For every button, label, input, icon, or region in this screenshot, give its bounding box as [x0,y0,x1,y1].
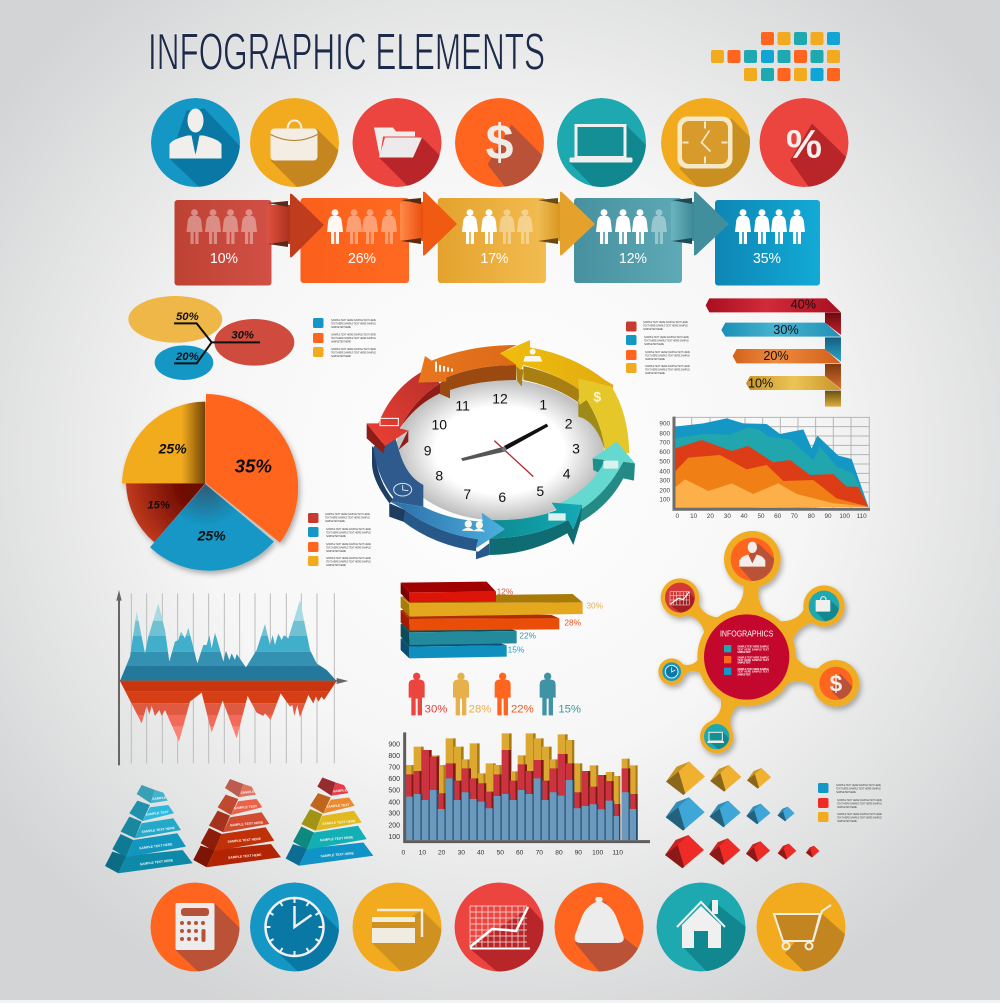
legend: bubble chart: TEXT HERE SAMPLE TEXT HERE SAMPLE [331,336,376,340]
y axis labels: 900 [659,421,670,428]
pie labels: 35% [235,456,272,477]
y axis labels: 400 [659,468,670,475]
pyramid: multicolour [286,777,373,866]
area: light orange [675,479,868,508]
x axis labels [676,513,867,520]
bar labels [497,586,604,655]
box: 26%: 26% [348,251,376,267]
person 15% [540,673,581,716]
clock face [396,379,604,521]
clock numbers: 9 [424,443,432,459]
3D horizontal bars [401,582,604,658]
x axis labels: 80 [808,513,815,520]
box: 35% [715,200,820,286]
legend: bubble chart [313,318,376,358]
person 22%: 22% [511,704,534,716]
y axis labels: 700 [388,765,400,772]
legend: clock: SAMPLE TEXT HERE [645,371,665,375]
legend: clock: SAMPLE TEXT HERE SAMPLE TEXT HERE [645,350,690,354]
bar 22% [401,624,517,645]
ring arrow: gold [500,340,613,403]
process row: percentage arrows with people [174,192,820,286]
icon: dollar [455,98,544,187]
legend: pie chart: SAMPLE TEXT HERE SAMPLE TEXT HERE [326,556,371,560]
y axis labels: 200 [659,487,670,494]
y axis labels: 300 [659,478,670,485]
y axis labels: 500 [659,459,670,466]
hub legend: TEXT HERE SAMPLE TEXT [737,671,770,674]
icon: credit cards [352,882,442,972]
box: 12%: 12% [619,251,647,267]
legend: clock: SAMPLE TEXT HERE [644,342,664,346]
grid [673,417,869,508]
lobe: dollar: $ [830,670,843,696]
person 30% [409,673,447,716]
pyramid: multicolour: SAMPLE TEXT HERE [320,835,354,842]
x axis labels: 0 [676,513,680,520]
y axis labels: 400 [388,799,400,806]
y axis labels: 600 [659,449,670,456]
legend: clock: TEXT HERE SAMPLE TEXT HERE SAMPLE [643,324,688,328]
slice: 35% orange [206,394,298,543]
slice: 15% red [126,483,205,542]
bar 12% [401,582,496,602]
title: INFOGRAPHIC ELEMENTS [148,24,545,82]
x axis labels: 30 [458,849,465,856]
legend: cubes: SAMPLE TEXT HERE [837,819,857,823]
bubble: 50% [128,296,222,343]
ring arrow: yellow [578,378,629,453]
area chart [659,417,870,520]
icon: percent: % [786,122,822,166]
hub legend: TEXT HERE SAMPLE TEXT [737,659,770,662]
icon: folder [352,98,442,187]
icon: shopping cart [756,882,846,972]
pyramid: teal: SAMPLE TEXT HERE [140,858,174,866]
pyramid: teal [105,785,193,873]
legend: pie chart: TEXT HERE SAMPLE TEXT HERE SAMPLE [326,560,371,564]
clock numbers [424,390,580,505]
clock with arrow ring [367,340,635,559]
bar labels: 28% [564,617,582,627]
clock numbers: 10 [432,417,447,433]
x axis labels: 10 [419,849,426,856]
legend: cubes: TEXT HERE SAMPLE TEXT HERE SAMPLE [837,802,882,806]
y axis labels: 800 [388,753,400,760]
legend: cubes: TEXT HERE SAMPLE TEXT HERE SAMPLE [836,786,881,790]
hub legend: SAMPLE TEXT HERE SAMPLE [737,668,769,671]
legend: pie chart: TEXT HERE SAMPLE TEXT HERE SAMPLE [326,546,371,550]
legend: clock: SAMPLE TEXT HERE [645,357,665,361]
blue stacks [406,778,638,840]
clock numbers: 5 [536,483,544,499]
box: 17%: 17% [480,251,509,267]
clock numbers: 2 [565,415,573,431]
clock numbers: 12 [492,390,508,406]
bar labels: 30% [586,600,604,610]
vertical guide lines [131,593,334,763]
arrow 1 [267,194,324,258]
legend: bubble chart: SAMPLE TEXT HERE SAMPLE TEXT HERE [331,347,376,351]
hub legend: SAMPLE TEXT [737,651,751,654]
person 30%: 30% [425,704,447,716]
x axis labels: 10 [690,513,698,520]
ribbon 30%: 30% [773,323,799,337]
x axis labels: 0 [401,849,405,856]
legend: pie chart: SAMPLE TEXT HERE [325,519,345,523]
x axis labels: 20 [438,849,446,856]
pie labels: 25% [197,528,226,544]
legend: pie chart: SAMPLE TEXT HERE [326,534,346,538]
legend: clock: SAMPLE TEXT HERE SAMPLE TEXT HERE [644,335,689,339]
ring arrow: blue [389,502,505,559]
box: 26% [300,198,409,283]
red cubes [665,835,820,868]
label 20%: 20% [175,351,199,363]
lobe: clock [662,662,681,681]
pyramid: teal: SAMPLE TEXT HERE [139,842,173,850]
box: 12% [574,198,682,283]
bubble: 30% [214,319,294,366]
legend: pie chart: TEXT HERE SAMPLE TEXT HERE SAMPLE [325,516,370,520]
x axis labels: 50 [757,513,765,520]
icon: laptop [557,98,646,187]
ribbon chart [706,298,841,407]
legend: cubes [818,783,882,823]
x axis labels: 90 [824,513,832,520]
legend: clock: TEXT HERE SAMPLE TEXT HERE SAMPLE [644,338,689,342]
icon: clock [250,882,339,972]
icon: calculator [150,882,240,972]
area: orange [675,455,868,508]
cubes [665,762,820,868]
person 15%: 15% [558,704,581,716]
person 28% [453,673,491,716]
pie labels: 15% [147,500,170,512]
box: 17% [438,198,546,283]
people percentages [409,673,581,716]
bubble chart [128,296,294,380]
legend: pie chart [308,512,371,567]
x axis labels: 20 [707,513,714,520]
clock numbers: 3 [572,441,580,457]
x axis labels: 50 [497,849,504,856]
pyramid: red: SAMPLE TEXT HERE [230,820,264,827]
box: 10% [174,200,272,286]
legend: bubble chart: SAMPLE TEXT HERE [331,325,351,329]
lobe: person [731,538,774,581]
mirrored area chart [116,590,348,766]
legend: cubes: SAMPLE TEXT HERE SAMPLE TEXT HERE [836,783,881,787]
x axis labels: 100 [592,849,603,856]
clock numbers: 7 [463,486,471,502]
legend: bubble chart: SAMPLE TEXT HERE SAMPLE TEXT HERE [331,332,376,336]
lower red area [120,682,336,742]
pyramid: multicolour: SAMPLE TEXT HERE [322,819,357,826]
blue cubes [666,797,795,831]
legend: pie chart: SAMPLE TEXT HERE [326,563,346,567]
legend: bubble chart: SAMPLE TEXT HERE [331,354,351,358]
area: red [675,440,868,508]
legend: cubes: SAMPLE TEXT HERE SAMPLE TEXT HERE [837,812,882,816]
infographics network [658,531,859,753]
y axis labels: 300 [388,811,400,818]
gold stacks [406,733,638,840]
axes [405,732,650,842]
hub legend [724,645,770,676]
slice: 25% blue [150,484,274,571]
slice: 25% yellow [122,402,205,483]
legend: clock: SAMPLE TEXT HERE [643,327,663,331]
legend: bubble chart: TEXT HERE SAMPLE TEXT HERE SAMPLE [331,322,376,326]
y axis labels: 700 [659,440,670,447]
upper blue area [120,600,336,680]
x axis labels: 40 [740,513,748,520]
hub legend: SAMPLE TEXT [737,673,751,676]
pie labels: 25% [158,441,187,457]
legend: pie chart: SAMPLE TEXT HERE SAMPLE TEXT HERE [325,512,370,516]
clock numbers: 1 [539,396,547,412]
hub centre [704,614,789,700]
ring icons: $ [593,389,601,405]
x axis labels [401,849,623,856]
decorative colour squares [711,32,840,81]
box: 10%: 10% [210,251,238,267]
hub legend: SAMPLE TEXT HERE SAMPLE [737,656,769,659]
x axis labels: 60 [516,849,524,856]
axes and arrows [116,590,348,765]
icon: percent [760,98,848,187]
y axis labels [659,421,670,504]
icon: house [656,882,746,972]
bar 28% [401,610,559,631]
clock numbers: 6 [498,489,506,505]
x axis labels: 30 [724,513,731,520]
label 50%: 50% [176,311,199,323]
pyramid: multicolour: SAMPLE TEXT HERE [320,851,355,858]
legend: pie chart: TEXT HERE SAMPLE TEXT HERE SAMPLE [326,530,371,534]
lobe: chart [665,583,695,613]
pyramid: red [193,779,281,867]
y axis labels: 200 [388,822,400,829]
x axis labels: 70 [536,849,543,856]
ribbon 10%: 10% [748,376,773,390]
axes [674,417,870,509]
y axis labels [388,741,400,841]
lobe: briefcase [809,591,839,621]
x axis labels: 110 [857,513,867,520]
stacked bar chart [388,732,650,856]
area: blue [675,418,868,508]
network base [658,531,859,753]
bar 15% [401,638,507,658]
clock hands [461,424,548,477]
pyramid: red: SAMPLE TEXT HERE [228,853,262,860]
red stacks [406,750,638,840]
ring arrow: red [367,370,440,453]
y axis labels: 800 [659,430,670,437]
person 28%: 28% [469,704,491,716]
icon: businessman [151,98,240,187]
y axis labels: 100 [388,834,400,841]
bar 30% [401,594,583,617]
icon: square clock [661,98,750,187]
legend: clock: TEXT HERE SAMPLE TEXT HERE SAMPLE [645,368,690,372]
y axis labels: 600 [388,776,400,783]
icon: briefcase [250,98,339,187]
x axis labels: 80 [555,849,563,856]
pyramid: teal: SAMPLE TEXT HERE [141,826,176,834]
legend: clock: SAMPLE TEXT HERE SAMPLE TEXT HERE [645,364,690,368]
legend: cubes: TEXT HERE SAMPLE TEXT HERE SAMPLE [837,816,882,820]
ring arrow: teal [488,503,582,555]
legend: clock: TEXT HERE SAMPLE TEXT HERE SAMPLE [645,354,690,358]
ribbon 40%: 40% [791,298,816,312]
legend: bubble chart: SAMPLE TEXT HERE [331,340,351,344]
pyramid: teal: SAMPLE TEXT [145,810,169,817]
pyramid: multicolour: SAMPLE [333,788,348,793]
arrow 3 [537,192,595,256]
pyramid: multicolour: SAMPLE TEXT [326,803,350,809]
pie labels [147,441,272,544]
label 30%: 30% [231,330,254,342]
hub legend: TEXT HERE SAMPLE TEXT [737,648,770,651]
x axis labels: 90 [575,849,582,856]
legend: bubble chart: TEXT HERE SAMPLE TEXT HERE SAMPLE [331,350,376,354]
legend: pie chart: SAMPLE TEXT HERE SAMPLE TEXT HERE [326,527,371,531]
box: 35%: 35% [753,251,781,267]
bubble: 20% [155,345,213,380]
area: teal [675,427,868,508]
y axis labels: 500 [388,788,400,795]
ring arrow: turquoise [560,442,635,523]
legend: pie chart: SAMPLE TEXT HERE [326,549,346,553]
icon: line chart [454,882,544,972]
hub heading: INFOGRAPHICS [720,629,773,638]
x axis labels: 40 [477,849,485,856]
pyramid: red: SAMPLE TEXT HERE [227,837,262,844]
pyramid: teal: SAMPLE [152,795,167,801]
ring icon: clock [394,483,412,496]
icon: dollar: $ [486,114,514,170]
legend: clock [626,320,690,375]
ring icons [380,349,618,532]
y axis labels: 900 [388,741,400,748]
bar labels: 22% [519,631,537,641]
ring arrow: orange [418,345,517,398]
bar labels: 12% [497,586,514,596]
legend: pie chart: SAMPLE TEXT HERE SAMPLE TEXT HERE [326,542,371,546]
pie chart [122,394,298,571]
y axis labels: 100 [659,497,670,504]
x axis labels: 70 [791,513,798,520]
clock numbers: 11 [455,398,470,414]
hub legend: SAMPLE TEXT [737,662,751,665]
ribbon 20%: 20% [763,349,789,363]
hub legend: SAMPLE TEXT HERE SAMPLE [737,646,769,649]
x axis labels: 60 [774,513,782,520]
legend: cubes: SAMPLE TEXT HERE SAMPLE TEXT HERE [837,798,882,802]
pyramid: red: SAMPLE [240,790,255,795]
legend: cubes: SAMPLE TEXT HERE [836,790,856,794]
lobe: dollar [819,667,853,700]
x axis labels: 110 [612,849,623,856]
clock numbers: 4 [563,466,571,482]
legend: clock: SAMPLE TEXT HERE SAMPLE TEXT HERE [643,320,688,324]
clock numbers: 8 [435,468,443,484]
legend: bubble chart: SAMPLE TEXT HERE SAMPLE TEXT HERE [331,318,376,322]
person 22% [495,673,534,716]
lobe: laptop [704,724,729,749]
icon: purse [554,882,644,972]
ring arrow: dark blue [372,437,423,507]
legend: cubes: SAMPLE TEXT HERE [837,805,857,809]
x axis labels: 100 [839,513,850,520]
leader lines [174,323,260,363]
pyramid: red: SAMPLE TEXT [234,804,257,810]
arrow 2 [400,192,457,256]
arrow 4 [671,192,729,256]
bar labels: 15% [508,645,525,655]
yellow cubes [666,762,771,795]
